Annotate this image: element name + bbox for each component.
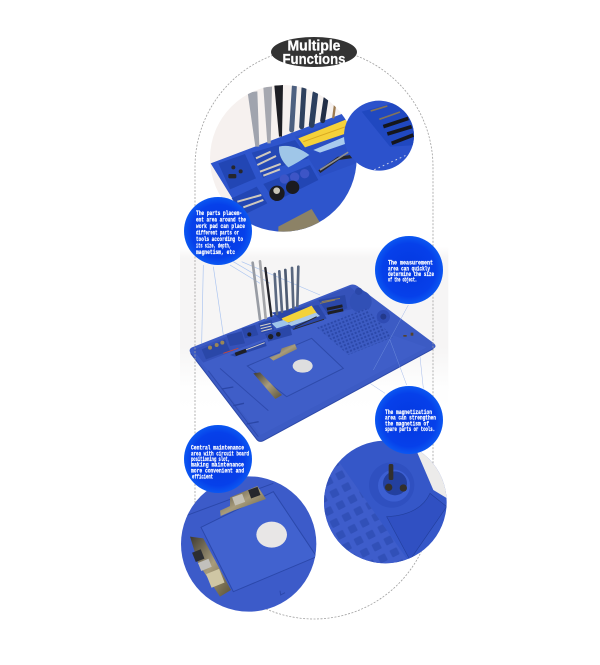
- parts top-right tray: [320, 298, 340, 303]
- callout: measurement: area can quickly: [388, 265, 430, 272]
- circuit board piece: [278, 209, 320, 233]
- tools compartment: [252, 140, 308, 178]
- tweezers: [248, 91, 259, 147]
- callout: central maintenance: making maintenance: [191, 462, 244, 469]
- inset small marks: [374, 155, 406, 170]
- tray base: [210, 114, 356, 232]
- bottom right detail circle: [323, 441, 450, 563]
- callout: parts placement: [184, 197, 252, 265]
- screwdrivers: [292, 87, 335, 130]
- callout: parts placement: magnetism, etc: [196, 249, 235, 256]
- callout: parts placement: tools according to: [196, 236, 243, 243]
- callout: magnetization: area can strengthen: [385, 415, 436, 422]
- callout: measurement: [375, 236, 443, 304]
- white positioning circle: [256, 522, 287, 548]
- side notches: [222, 387, 259, 424]
- mat body: [190, 285, 436, 441]
- title: Multiple: [288, 38, 340, 54]
- callout: central maintenance: more convenient and: [191, 468, 244, 475]
- tray left compartment: [218, 154, 256, 189]
- board left: [190, 537, 231, 597]
- callout: central maintenance: Central maintenance: [191, 445, 244, 452]
- black tweezers in tray: [293, 317, 324, 329]
- callout: measurement: The measurement: [388, 260, 433, 267]
- mat inner work surface: [202, 310, 427, 435]
- capacitors: [269, 186, 285, 201]
- notch: [280, 591, 285, 595]
- dashed stadium outline: [195, 48, 433, 619]
- callout: magnetization: The magnetization: [385, 409, 432, 416]
- screws at left: [208, 341, 224, 350]
- round wells: [350, 291, 372, 313]
- connector lines over mat: [370, 305, 423, 393]
- callout: magnetization: the magnetism of: [385, 420, 429, 427]
- board top chips: [232, 494, 245, 506]
- knob compartment: [263, 165, 318, 202]
- photo background: [180, 247, 448, 413]
- yellow pry tools: [282, 306, 317, 323]
- circle background: [324, 441, 447, 563]
- inset black bits: [383, 118, 413, 143]
- main photo: repair mat: [180, 247, 448, 441]
- connector lines behind mat: [202, 262, 320, 343]
- bottom left detail circle: [181, 476, 317, 612]
- callout: measurement: of the object.: [388, 277, 417, 284]
- callout: central maintenance: [184, 425, 252, 493]
- magnet well: [377, 310, 390, 323]
- black tweezers: [318, 155, 352, 173]
- callout: parts placement: The parts placem-: [196, 210, 242, 217]
- slot inner: [201, 492, 317, 592]
- long compartment: [298, 118, 356, 176]
- callout: parts placement: ent area around the: [196, 216, 246, 224]
- tweezers and screwdrivers: [253, 261, 298, 319]
- curved groove: [387, 493, 447, 560]
- magnet ring: [369, 462, 414, 508]
- callout: parts placement: work pad can place: [196, 223, 245, 230]
- callout: parts placement: different parts or: [196, 230, 239, 236]
- magnetization grid area: [317, 308, 393, 355]
- callout: parts placement: its size, depth,: [196, 242, 231, 250]
- callout: central maintenance: efficient: [192, 474, 213, 481]
- callout: central maintenance: positioning slot,: [191, 456, 230, 463]
- board left chips: [192, 549, 224, 588]
- inset screws: [371, 106, 400, 119]
- small parts right: [403, 333, 413, 337]
- yellow pry tools: [298, 120, 347, 148]
- inset compartment: [362, 103, 414, 146]
- side rim groove: [208, 368, 268, 437]
- lower left compartment: [232, 187, 267, 215]
- blue pry tool: [314, 137, 345, 153]
- blue pick: [279, 146, 309, 167]
- front edge shadow: [191, 349, 433, 441]
- dark parts: [235, 304, 344, 356]
- top detail circle: [210, 85, 418, 237]
- screws: [228, 165, 243, 178]
- red tool: [223, 348, 238, 353]
- grid area: [323, 460, 410, 563]
- screws: [385, 464, 407, 492]
- callout: magnetization: [375, 386, 443, 454]
- board top: [220, 486, 266, 516]
- circle background: [181, 476, 316, 612]
- metal parts: [237, 152, 281, 207]
- callout: central maintenance: area with circuit board: [191, 450, 249, 457]
- central maintenance slot: [247, 338, 343, 397]
- slot edges: [183, 483, 273, 517]
- tray compartments: [202, 295, 347, 359]
- metal parts: [237, 323, 272, 353]
- title: Functions: [282, 51, 346, 68]
- title: [271, 37, 357, 68]
- small inset circle: [344, 101, 414, 171]
- back tray strip: [193, 287, 370, 363]
- circle background: [210, 85, 357, 232]
- callout: magnetization: spare parts or tools.: [385, 426, 435, 433]
- light corner: [418, 452, 446, 498]
- callout: measurement: determine the size: [388, 271, 434, 278]
- white positioning circle: [293, 359, 313, 373]
- circuit board top: [269, 344, 297, 361]
- circuit board left: [253, 372, 282, 399]
- blue knobs: [280, 169, 309, 184]
